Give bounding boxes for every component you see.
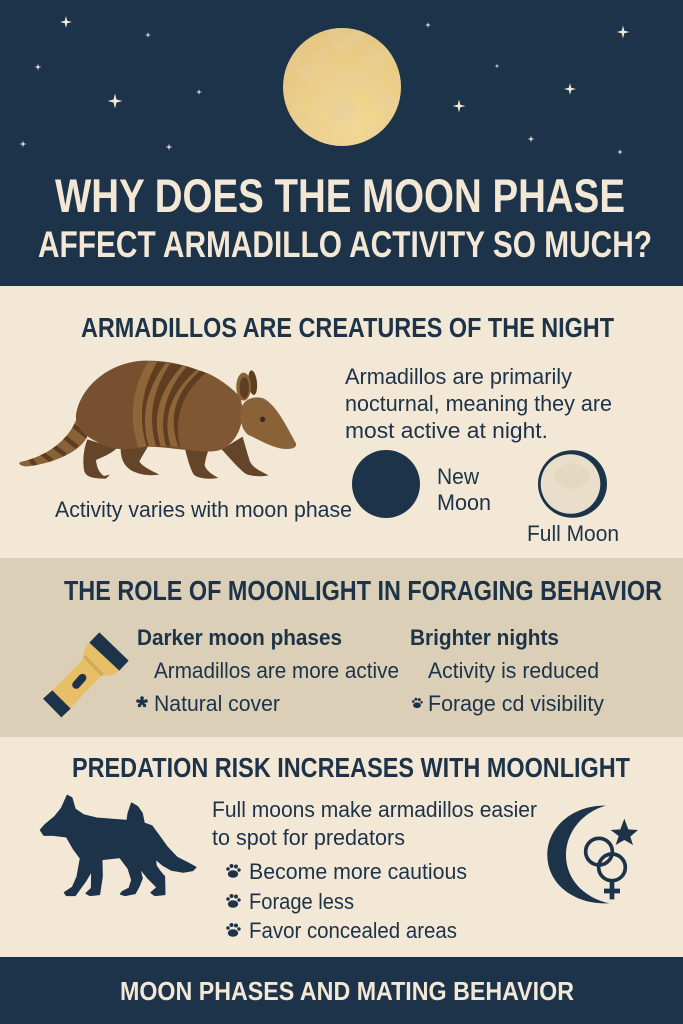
icon: new moon [352,450,420,518]
column: brighter nights [410,625,604,716]
column: brighter nights: Brighter nights [410,625,559,650]
text: full moons description: Full moons make armadillos easier [212,797,537,822]
column: darker moon phases [136,625,399,716]
text: nocturnal description: nocturnal, meaning they are [345,391,612,416]
list: cautious behaviors: Become more cautious [249,859,467,884]
text: nocturnal description [345,364,612,443]
icon: armadillo [19,361,296,479]
icon: crescent, star and female symbols [547,806,638,903]
panel: footer [0,957,683,1024]
column: brighter nights: Activity is reduced [428,658,599,683]
panel: creatures of the night [19,318,618,541]
column: darker moon phases: Darker moon phases [137,625,342,650]
heading: moon phases and mating behavior: MOON PHASES AND MATING BEHAVIOR [120,976,574,1006]
column: brighter nights: Forage cd visibility [428,691,604,716]
caption: activity varies: Activity varies with moon phase [55,497,352,522]
column: darker moon phases: Armadillos are more active [154,658,399,683]
icon: full moon [283,28,401,146]
stars [20,16,630,155]
text: nocturnal description: most active at night. [345,418,548,443]
list: cautious behaviors: Favor concealed areas [249,918,457,943]
label: new moon: Moon [437,490,491,515]
text: nocturnal description: Armadillos are primarily [345,364,572,389]
label: full moon: Full Moon [527,521,619,546]
column: darker moon phases: Natural cover [154,691,280,716]
panel: header [0,0,683,286]
title [38,169,652,265]
list: cautious behaviors [226,859,467,943]
label: new moon [437,464,491,515]
icon: bullet mark [136,696,148,707]
list: cautious behaviors: Forage less [249,889,354,914]
panel: predation risk [0,737,683,957]
text: full moons description [212,797,537,850]
icon: full moon ring [538,450,607,518]
icon: fox silhouette [41,796,196,895]
icon: paw bullet [412,698,423,708]
icon: flashlight [43,632,129,717]
panel: role of moonlight [0,558,683,737]
label: new moon: New [437,464,479,489]
text: full moons description: to spot for predators [212,825,405,850]
